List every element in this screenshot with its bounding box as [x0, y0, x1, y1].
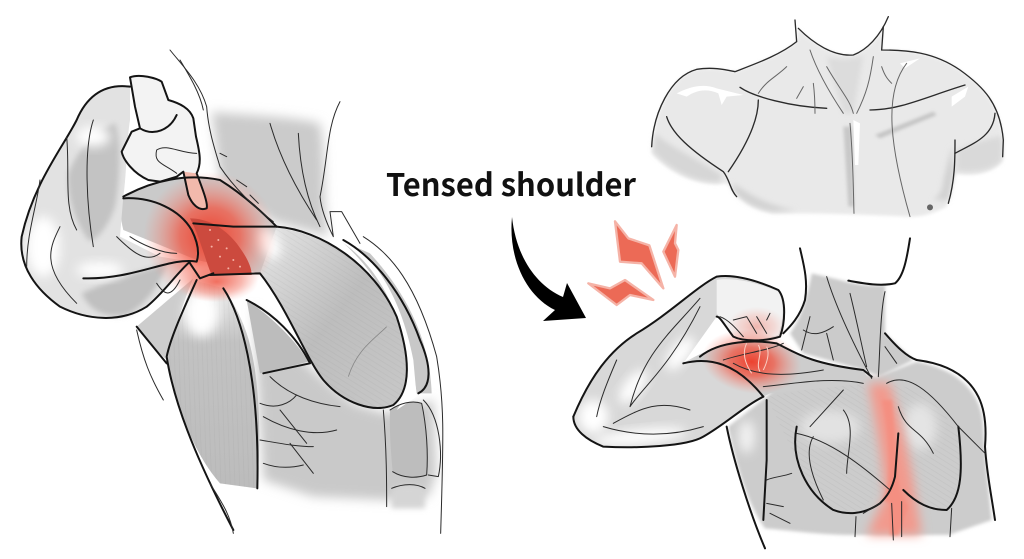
pale vessels on shoulder	[744, 343, 768, 373]
faint chest crease	[348, 327, 387, 377]
serratus muscle	[247, 300, 308, 373]
pectoral muscles with hatching	[767, 380, 887, 513]
chest lines	[652, 17, 1003, 203]
torso fill	[728, 360, 992, 535]
neck and trapezius shading	[212, 112, 328, 237]
main contour lines	[21, 76, 429, 530]
white highlights	[677, 86, 743, 105]
upper right figure: relaxed chest	[652, 17, 1003, 217]
deltoid and collar shading	[653, 133, 722, 182]
biceps shade	[68, 123, 119, 240]
lower arm shade	[82, 263, 167, 316]
hand	[122, 76, 207, 209]
secondary lines	[27, 50, 443, 533]
finger pad tint	[183, 172, 207, 209]
arrow: curved black arrow	[511, 217, 586, 321]
arm muscle mass	[21, 86, 190, 318]
neck fill	[790, 273, 913, 377]
upper deltoid muscle	[121, 177, 277, 273]
white highlights	[717, 279, 783, 339]
red glow on shoulder	[698, 323, 806, 400]
chest fill	[652, 27, 1003, 217]
heading: Tensed shoulder: Tensed shoulder	[386, 160, 636, 205]
long back muscle	[167, 280, 259, 488]
arm fill	[573, 276, 784, 447]
large chest muscle	[260, 227, 407, 408]
red glow along sternum	[867, 383, 922, 535]
lower right figure: tense muscles	[573, 238, 995, 548]
white highlights	[184, 290, 219, 337]
flank muscle under arm	[137, 278, 193, 360]
side torso strip	[340, 240, 432, 393]
shoulder band fill	[683, 342, 870, 397]
inflamed muscle patch	[190, 218, 252, 275]
icon: red pain bursts	[588, 221, 678, 305]
rib and abdomen shading	[253, 307, 437, 500]
left figure: muscular shoulder and torso	[21, 50, 443, 533]
main contour lines	[573, 238, 995, 548]
secondary lines	[597, 277, 985, 540]
abdominal blocks	[390, 402, 427, 477]
nipple	[927, 204, 933, 210]
white band between pectoral and side	[333, 235, 417, 410]
red pain glow	[143, 172, 277, 302]
